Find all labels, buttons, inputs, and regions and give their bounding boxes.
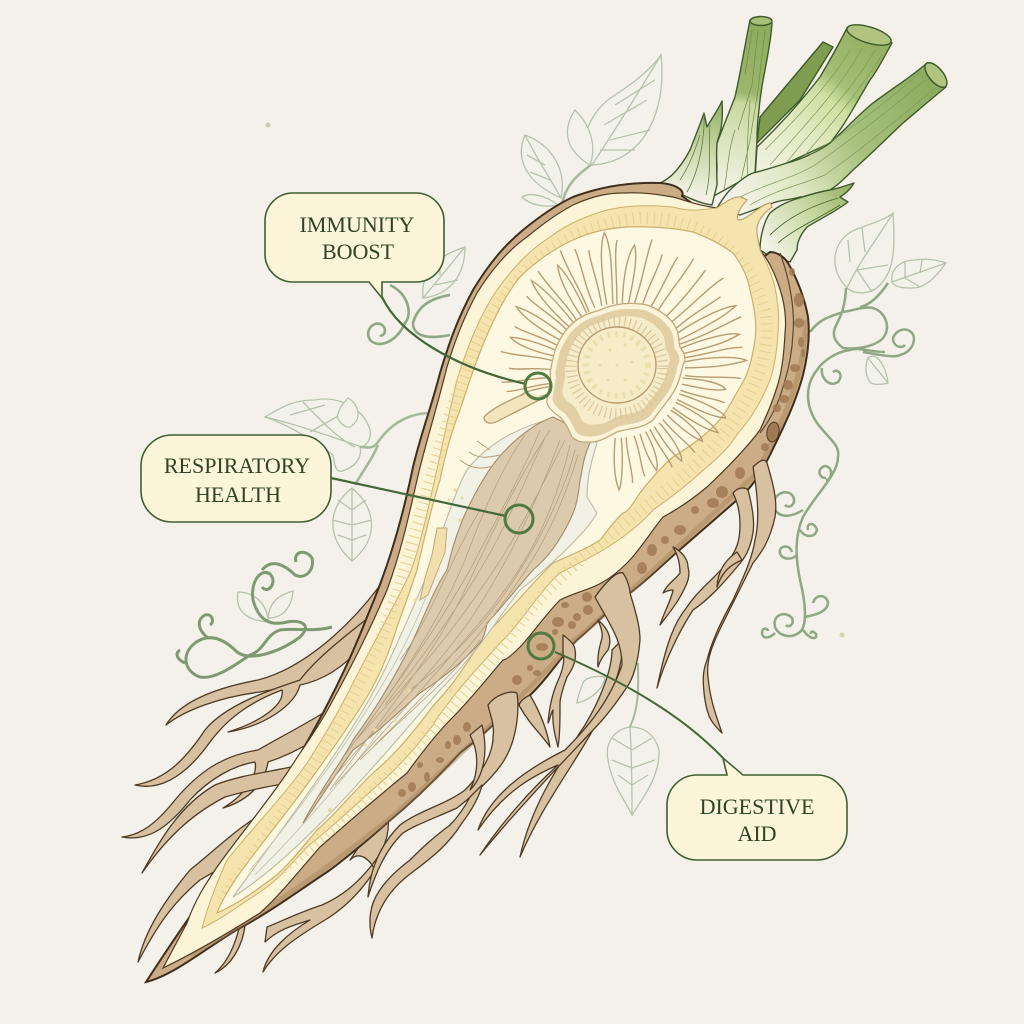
leaf: bottom — [577, 663, 659, 815]
callout: respiratory health: HEALTH — [195, 482, 281, 507]
leaves: respiratory — [265, 398, 370, 471]
leaf: top small — [521, 135, 562, 206]
yellow hatching — [222, 218, 767, 900]
marker: immunity — [525, 373, 551, 399]
root: mid left 1 — [122, 712, 325, 838]
storage duct — [420, 528, 447, 600]
callout: digestive aid: DIGESTIVE — [700, 794, 814, 819]
marker: respiratory — [505, 505, 533, 533]
roots: right side — [368, 460, 776, 938]
root: upper left 2 — [135, 618, 368, 786]
root: far right — [703, 460, 776, 733]
callout: immunity boost: BOOST — [322, 239, 395, 264]
vine: right — [762, 283, 914, 638]
leaf: right small — [892, 259, 946, 288]
yellow band — [202, 197, 779, 928]
small specks — [328, 488, 464, 812]
stems — [660, 16, 951, 262]
vine: respiratory — [355, 413, 427, 485]
vascular rays — [501, 232, 747, 490]
callout: digestive aid — [667, 758, 847, 860]
root body — [146, 183, 809, 982]
leaf: top large — [585, 55, 662, 165]
leader: respiratory — [331, 478, 506, 516]
leader: digestive — [555, 652, 723, 758]
inner parenchyma — [217, 227, 756, 913]
callout: immunity boost: IMMUNITY — [300, 212, 415, 237]
stem: centre — [755, 21, 893, 178]
sheath: left — [660, 101, 722, 205]
root: right second — [657, 488, 754, 688]
leaf: right large — [835, 213, 894, 293]
root: big centre — [478, 573, 640, 855]
callout: respiratory health — [141, 435, 331, 522]
leaf: top mid — [567, 110, 593, 165]
root: mini 2 — [470, 725, 485, 790]
vine: immunity — [368, 285, 450, 344]
root: tip fork — [215, 925, 245, 973]
callout: immunity boost — [265, 193, 444, 298]
vine: lower left — [177, 552, 332, 677]
skin lenticel — [765, 421, 781, 443]
root: big centre tip — [520, 640, 622, 857]
sheath: right — [760, 183, 854, 262]
core tissue — [303, 417, 590, 823]
left fibre strokes — [460, 441, 500, 468]
root: upper left 1 — [166, 588, 378, 725]
leaf: respiratory lower — [332, 488, 372, 561]
stem: back dark — [757, 42, 833, 143]
leaves and vines — [177, 55, 946, 815]
stem: left — [712, 16, 772, 197]
root: lower fork — [263, 808, 388, 972]
root: mini — [598, 620, 610, 667]
callout: digestive aid: AID — [737, 821, 777, 846]
side ray bulb — [484, 394, 545, 423]
marker: digestive — [528, 633, 554, 659]
root: big lower — [368, 692, 518, 897]
root: mid left 2 — [138, 765, 300, 962]
root: small spur — [519, 695, 550, 747]
pale sheath — [233, 418, 597, 897]
roots: left side — [122, 588, 388, 973]
cortex cream — [163, 193, 786, 968]
skin spots — [398, 268, 805, 797]
root: small — [660, 547, 689, 625]
callout: respiratory health: RESPIRATORY — [164, 453, 310, 478]
leaf: immunity — [423, 247, 465, 298]
vine: top — [562, 158, 600, 205]
leaf: right lower — [866, 356, 888, 384]
central medulla — [547, 303, 685, 442]
leader: immunity — [382, 297, 526, 384]
root: thin — [548, 635, 575, 747]
leaves: lower left — [237, 591, 293, 622]
stem: right — [717, 59, 951, 215]
outer skin — [146, 183, 809, 982]
